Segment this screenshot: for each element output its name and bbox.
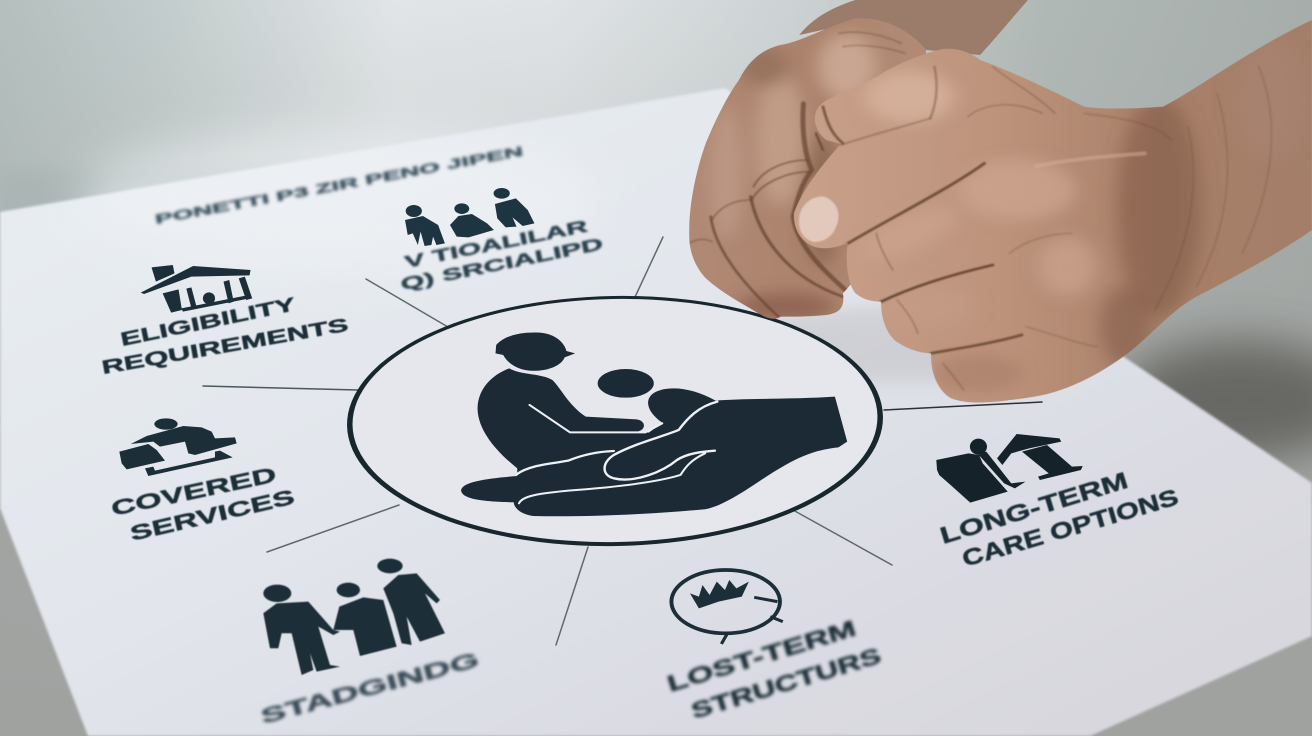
item: lost-term structurs: [664, 570, 884, 724]
back forearm: [799, 0, 1028, 55]
icon: three figures: [405, 188, 534, 246]
item: covered services: [109, 418, 297, 546]
item: long-term care options: [936, 434, 1181, 572]
label: covered: COVERED: [109, 463, 278, 521]
photo: clasped hands: [677, 0, 1312, 417]
item: eligibility requirements: [100, 265, 350, 378]
label: blurred line two: Q) SRCIALIPD: [399, 234, 605, 294]
label: services: SERVICES: [128, 486, 297, 546]
item: standing family: [258, 559, 482, 729]
label: requirements: REQUIREMENTS: [100, 315, 350, 378]
central circle: [345, 291, 885, 551]
front hand and arm: [785, 17, 1312, 417]
icon: dial with crown: [671, 570, 783, 644]
icon: house: [141, 265, 252, 313]
label: blurred line one: V TIOALILAR: [403, 217, 589, 272]
back hand: [689, 18, 926, 319]
thumbnail: [799, 196, 838, 242]
heading: blurred title: PONETTI P3 ZIR PENO JIPEN: [154, 144, 524, 227]
icon: house and building: [936, 434, 1083, 503]
item: top family: [399, 188, 605, 294]
vein highlight: [1034, 153, 1146, 167]
label: stadgindg: STADGINDG: [258, 648, 482, 729]
label: structurs: STRUCTURS: [688, 643, 884, 724]
label: lost-term: LOST-TERM: [664, 616, 859, 697]
icon: family of three: [263, 559, 445, 675]
icon: caregiver and child in hand: [461, 332, 847, 516]
icon: services desk: [119, 418, 237, 476]
label: care options: CARE OPTIONS: [959, 484, 1181, 572]
label: long-term: LONG-TERM: [937, 467, 1131, 549]
hands shadow on paper: [720, 307, 1080, 383]
connector lines: [203, 237, 1042, 645]
label: eligibility: ELIGIBILITY: [119, 294, 297, 350]
